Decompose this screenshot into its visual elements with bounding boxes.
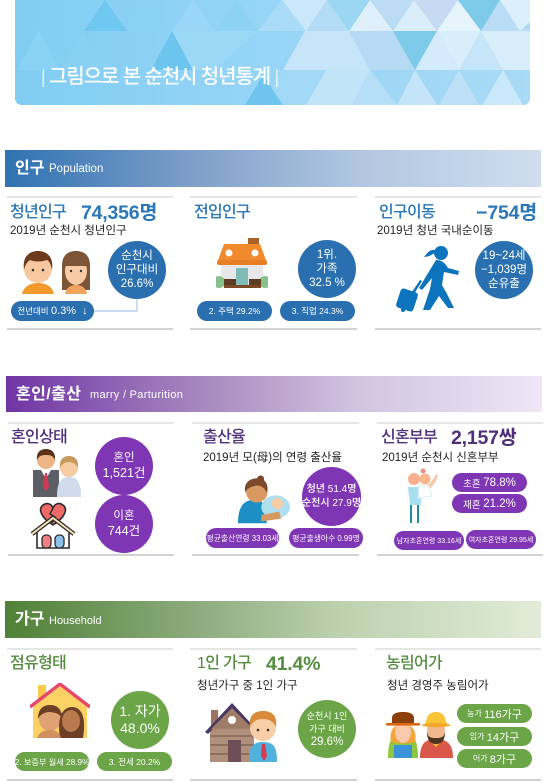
icon: farmers [386, 712, 453, 758]
callout circle: 26.6% [121, 278, 153, 290]
pill: 21.2% [483, 498, 516, 510]
section band: population: 인구 [15, 160, 44, 177]
pill: 평균출산연령 33.03세 [207, 534, 278, 542]
banner triangle pattern [15, 0, 530, 105]
subtitle: 2019년 모(母)의 연령 출산율 [203, 452, 342, 464]
heading: 점유형태 [10, 655, 66, 672]
subtitle: 청년 경영주 농림어가 [387, 680, 489, 692]
value: −754명 [476, 202, 537, 224]
heading: 청년인구 [10, 204, 66, 221]
pill: 농가 [467, 709, 482, 718]
callout circle: 순천시 [121, 250, 153, 262]
value: 2,157쌍 [451, 427, 517, 449]
pill: 78.8% [483, 476, 516, 488]
panel: tenure type [7, 648, 173, 781]
heading: 농림어가 [386, 655, 442, 672]
pill [466, 530, 536, 549]
section band: population [5, 150, 541, 187]
pill: 남자초혼연령 33.16세 [397, 538, 461, 544]
section band: household: Household [49, 615, 102, 627]
icon: house [216, 238, 268, 288]
callout circle: 순천시 27.9명 [302, 498, 361, 508]
pill [197, 301, 272, 321]
pill [457, 704, 532, 723]
pill: 3. 직업 24.3% [292, 306, 343, 316]
panel: birth rate [192, 422, 363, 556]
pill [206, 528, 279, 548]
pill: 2. 주택 29.2% [209, 306, 260, 316]
section band: household [5, 601, 541, 638]
callout circle: 순유출 [488, 278, 520, 290]
pill: 3. 전세 20.2% [109, 756, 160, 766]
heading: 혼인상태 [11, 429, 67, 446]
heading: 전입인구 [194, 204, 250, 221]
section band: household: 가구 [15, 611, 44, 628]
heading: 1인 가구 [197, 655, 251, 672]
pill: 116가구 [484, 708, 522, 720]
callout circle [111, 691, 169, 749]
panel: farm households [375, 648, 541, 781]
subtitle: 2019년 청년 국내순이동 [377, 225, 494, 237]
pill: 0.3% ↓ [51, 305, 88, 317]
icon: young man and woman [22, 251, 90, 294]
callout circle: 가족 [316, 263, 338, 275]
section band: marriage and birth: marry / Parturition [90, 389, 183, 401]
pill: 여자초혼연령 29.95세 [469, 536, 533, 544]
value: 41.4% [266, 653, 320, 675]
section band: marriage and birth: 혼인/출산 [16, 386, 81, 403]
callout circle: marriage: 1,521건 [103, 466, 145, 480]
pill: 전년대비 [17, 306, 49, 316]
connector [94, 299, 138, 312]
subtitle: 청년가구 중 1인 가구 [197, 680, 298, 692]
icon: log house and man [205, 703, 277, 762]
icon: traveller with suitcase [396, 246, 459, 312]
callout circle [475, 241, 533, 299]
section band: population: Population [49, 163, 103, 175]
pill: 2. 보증부 월세 28.9% [15, 758, 89, 766]
heading: 출산율 [203, 429, 245, 446]
pill: 8가구 [490, 754, 516, 766]
pill: 초혼 [463, 478, 481, 490]
banner [15, 0, 530, 105]
pill: 평균출생아수 0.99명 [292, 534, 360, 542]
panel: youth population [7, 196, 173, 330]
pill [457, 749, 532, 768]
callout circle: 1. 자가 [119, 703, 161, 719]
callout circle: 29.6% [311, 736, 343, 748]
callout circle: 가구 대비 [309, 724, 345, 734]
pill [15, 752, 89, 771]
callout circle [302, 467, 361, 526]
icon: mother with baby [238, 476, 290, 524]
pill: 14가구 [487, 732, 519, 744]
panel: newlyweds [377, 422, 543, 556]
callout circle [108, 241, 166, 299]
callout circle: 32.5 % [309, 277, 345, 289]
callout circle: −1,039명 [481, 264, 527, 276]
pill [280, 301, 355, 321]
icon: family house [30, 683, 90, 738]
pill [11, 301, 94, 321]
pill [452, 494, 527, 513]
callout circle: 인구대비 [116, 264, 158, 276]
callout circle: divorce: 이혼 [113, 510, 135, 522]
value: 74,356명 [81, 202, 157, 224]
icon: bride and groom [33, 449, 81, 497]
pill: 재혼 [463, 500, 481, 510]
panel: single household [190, 648, 357, 781]
panel: migration [375, 196, 541, 330]
subtitle: 2019년 순천시 청년인구 [10, 225, 127, 237]
callout circle [298, 240, 356, 298]
banner title: | 그림으로 본 순천시 청년통계 | [41, 66, 278, 88]
heading: 신혼부부 [381, 429, 437, 446]
callout circle: 순천시 1인 [307, 710, 347, 720]
callout circle: divorce: 744건 [108, 524, 140, 538]
pill [97, 752, 172, 771]
icon: broken heart and house [30, 502, 76, 549]
callout circle [298, 700, 356, 758]
callout circle: 청년 51.4명 [307, 484, 356, 494]
pill [457, 727, 532, 746]
callout circle: marriage [95, 437, 153, 495]
callout circle: divorce [95, 495, 153, 553]
pill: 어가 [473, 754, 488, 763]
pill [289, 528, 363, 548]
pill: 임가 [470, 732, 485, 741]
panel: marital status [8, 422, 174, 556]
callout circle: 1위. [317, 249, 337, 261]
icon: newlywed couple [408, 468, 438, 523]
panel: in-migration [190, 196, 357, 330]
callout circle: 48.0% [120, 720, 160, 736]
subtitle: 2019년 순천시 신혼부부 [382, 452, 499, 464]
heading: 인구이동 [379, 204, 435, 221]
callout circle: marriage: 혼인 [113, 452, 135, 464]
callout circle: 19~24세 [483, 250, 525, 262]
pill [452, 473, 527, 492]
pill [394, 531, 464, 550]
section band: marriage and birth [6, 376, 542, 412]
